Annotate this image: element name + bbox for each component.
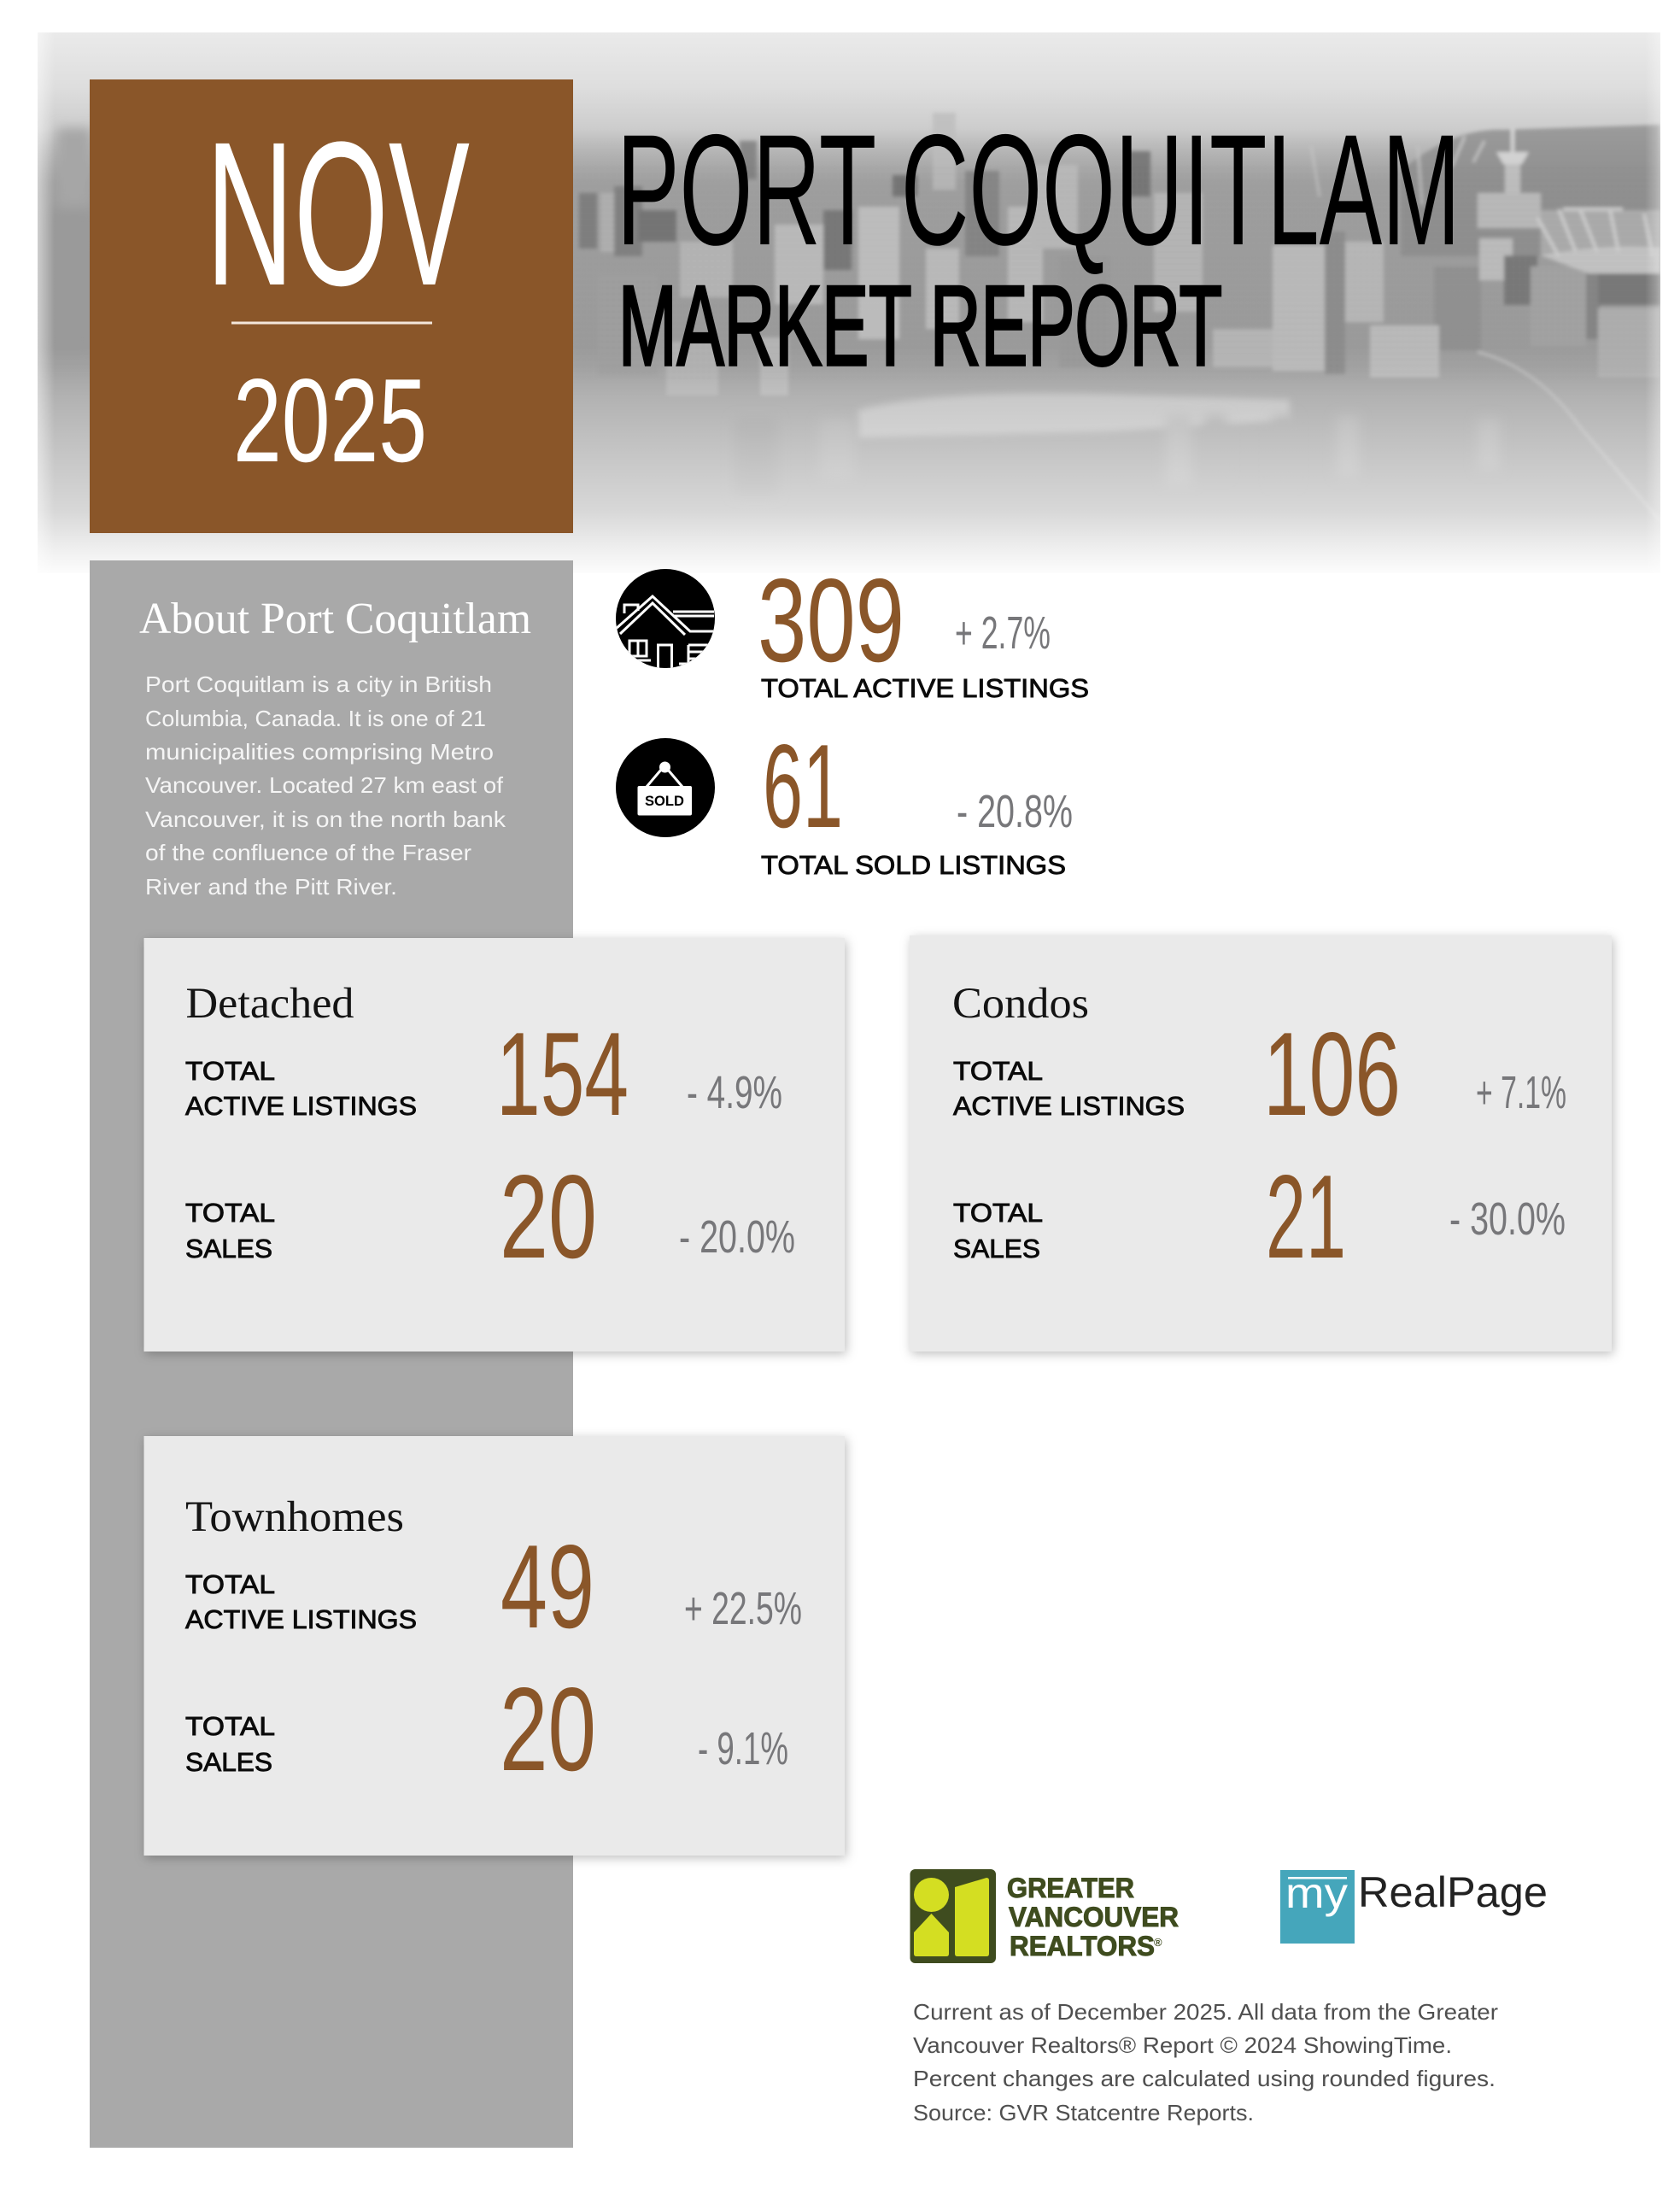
detached sales value: 20 <box>500 1151 597 1283</box>
townhomes sales label: TOTAL <box>185 1711 275 1741</box>
condos active listings label: ACTIVE LISTINGS <box>953 1091 1185 1121</box>
panel: detached <box>143 938 845 1351</box>
sold listings stat: 61 <box>763 720 843 853</box>
logo: Greater Vancouver Realtors: REALTORS <box>1010 1931 1155 1961</box>
townhomes active listings change: + 22.5% <box>684 1583 802 1634</box>
townhomes active listings label: ACTIVE LISTINGS <box>185 1604 417 1634</box>
detached active listings label: TOTAL <box>185 1056 275 1086</box>
logo: Greater Vancouver Realtors: VANCOUVER <box>1009 1902 1179 1932</box>
detached active listings change: - 4.9% <box>687 1067 782 1118</box>
detached heading: Detached <box>186 980 354 1028</box>
condos active listings label: TOTAL <box>953 1056 1043 1086</box>
townhomes sales value: 20 <box>500 1663 596 1796</box>
detached active listings label: ACTIVE LISTINGS <box>185 1091 417 1121</box>
header banner: city skyline photo <box>38 32 1660 573</box>
detached sales label: SALES <box>185 1234 272 1264</box>
townhomes active listings value: 49 <box>500 1521 594 1653</box>
sold listings label: TOTAL SOLD LISTINGS <box>761 850 1066 880</box>
about paragraph: River and the Pitt River. <box>145 874 397 900</box>
townhomes sales label: SALES <box>185 1747 272 1777</box>
townhomes sales change: - 9.1% <box>698 1723 788 1774</box>
about paragraph: of the confluence of the Fraser <box>145 840 471 865</box>
about paragraph: Columbia, Canada. It is one of 21 <box>145 706 486 731</box>
townhomes active listings label <box>185 1569 417 1634</box>
year: 2025 <box>233 355 427 487</box>
icon: sold sign: SOLD <box>645 793 684 809</box>
townhomes heading: Townhomes <box>185 1493 404 1541</box>
about paragraph: Port Coquitlam is a city in British <box>145 671 492 697</box>
about paragraph: municipalities comprising Metro <box>145 739 494 765</box>
about paragraph: Vancouver. Located 27 km east of <box>145 772 504 798</box>
panel: condos <box>910 935 1612 1351</box>
about paragraph <box>145 671 506 900</box>
logo: myRealPage: RealPage <box>1358 1868 1548 1916</box>
about heading: About Port Coquitlam <box>139 595 531 643</box>
condos sales label: TOTAL <box>953 1198 1043 1228</box>
detached sales label: TOTAL <box>185 1198 275 1228</box>
condos sales value: 21 <box>1266 1151 1346 1283</box>
condos sales label: SALES <box>953 1234 1040 1264</box>
logo: Greater Vancouver Realtors: GREATER <box>1007 1873 1134 1903</box>
condos active listings value: 106 <box>1263 1008 1401 1140</box>
footnote <box>913 1999 1498 2125</box>
report subtitle: MARKET REPORT <box>618 263 1222 390</box>
condos active listings change: + 7.1% <box>1476 1067 1566 1118</box>
logo: Greater Vancouver Realtors <box>910 1869 1179 1963</box>
detached active listings label <box>185 1056 417 1121</box>
logo: Greater Vancouver Realtors: ® <box>1154 1936 1162 1949</box>
condos heading: Condos <box>952 980 1089 1028</box>
condos active listings label <box>953 1056 1185 1121</box>
footnote: Source: GVR Statcentre Reports. <box>913 2100 1254 2125</box>
active listings change: + 2.7% <box>955 607 1051 659</box>
townhomes sales label <box>185 1711 275 1777</box>
sold listings change: - 20.8% <box>957 786 1073 837</box>
icon: sold sign <box>616 738 715 837</box>
active listings stat <box>758 554 1089 703</box>
footnote: Current as of December 2025. All data from the Greater <box>913 1999 1498 2025</box>
icon: house <box>616 569 715 672</box>
condos sales label <box>953 1198 1043 1264</box>
footnote: Percent changes are calculated using rounded figures. <box>913 2066 1496 2091</box>
report title <box>617 103 1460 390</box>
townhomes active listings label: TOTAL <box>185 1569 275 1599</box>
condos sales change: - 30.0% <box>1449 1193 1566 1245</box>
logo: myRealPage <box>1280 1868 1548 1944</box>
month: NOV <box>206 99 470 328</box>
active listings label: TOTAL ACTIVE LISTINGS <box>761 673 1089 703</box>
footnote: Vancouver Realtors® Report © 2024 ShowingTime. <box>913 2032 1452 2058</box>
detached active listings value: 154 <box>496 1008 629 1140</box>
detached sales change: - 20.0% <box>679 1211 795 1263</box>
panel: townhomes <box>143 1436 845 1856</box>
detached sales label <box>185 1198 275 1264</box>
active listings stat: 309 <box>758 554 904 687</box>
date block <box>90 79 573 533</box>
sold listings stat <box>761 720 1073 880</box>
panel: about sidebar <box>90 560 573 2148</box>
about paragraph: Vancouver, it is on the north bank <box>145 806 506 832</box>
logo: myRealPage: my <box>1285 1869 1348 1917</box>
